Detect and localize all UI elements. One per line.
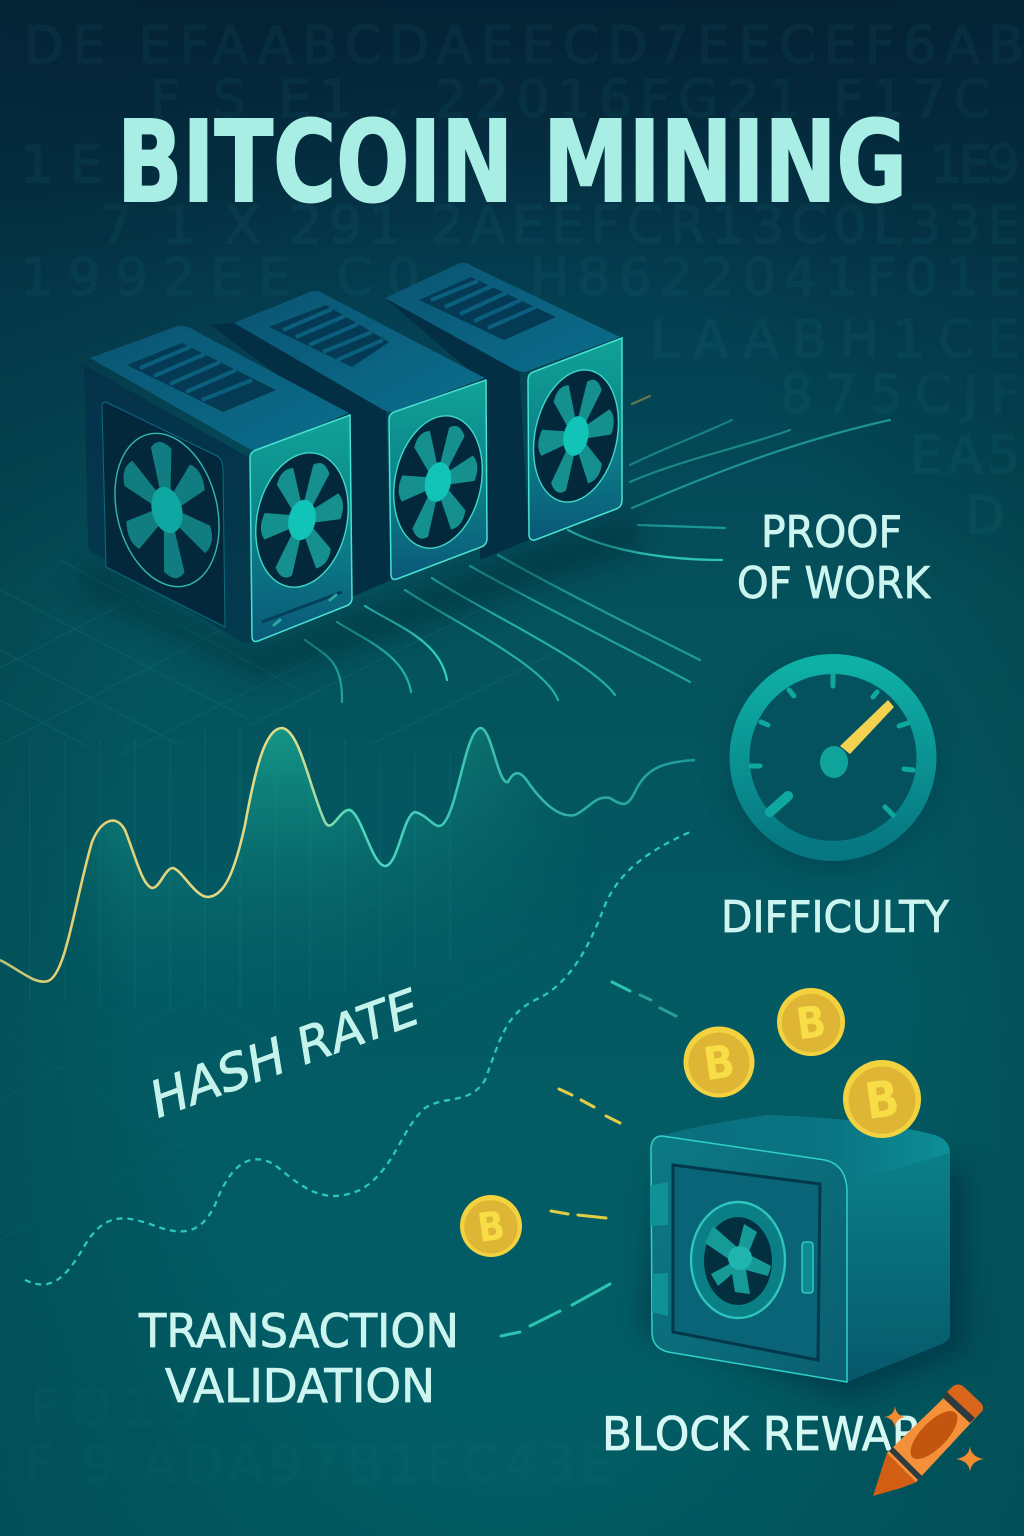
background hex text: F S E1 . 22016FG21 F17C	[150, 70, 990, 130]
background hex text: FO19	[30, 1378, 200, 1438]
miners	[80, 263, 640, 680]
coins above safe	[684, 988, 921, 1138]
label: transaction validation: TRANSACTION	[138, 1304, 459, 1358]
lower diagonal floor lines	[0, 880, 700, 1330]
miner 3	[385, 263, 630, 560]
background hex text: 1 E	[20, 135, 102, 195]
background hex text: D	[965, 486, 1005, 546]
dashed transaction path	[25, 832, 690, 1285]
safe	[640, 1115, 970, 1400]
label: transaction validation: VALIDATION	[165, 1359, 435, 1413]
safe handle	[802, 1242, 813, 1293]
background hex text: F 9 ADA97B1FC43E	[24, 1435, 614, 1495]
data lines from miners	[305, 396, 890, 702]
miner 2	[210, 291, 494, 600]
hash rate chart	[0, 728, 695, 1010]
label: transaction validation	[138, 1304, 459, 1413]
label: proof of work: PROOF	[761, 507, 902, 558]
background hex text: 1E9	[930, 135, 1020, 195]
miner shadow	[80, 510, 640, 680]
crayon icon	[873, 1384, 984, 1496]
background hex text: H8622041F01E	[530, 248, 1020, 308]
coin: small left	[460, 1195, 522, 1257]
label: proof of work	[737, 507, 931, 609]
background hex text: DE EFAABCDAEECD7EECEF6AB	[24, 16, 1024, 76]
label: block reward: BLOCK REWARD	[602, 1407, 956, 1461]
safe front	[651, 1136, 847, 1382]
label: proof of work: OF WORK	[737, 558, 931, 609]
safe dial	[691, 1202, 785, 1318]
background hex text: 7 1 X 291 2AEEFCR13C0L33E	[100, 196, 1020, 256]
safe top	[652, 1115, 950, 1184]
gauge icon	[729, 661, 937, 869]
miner 1	[84, 326, 360, 643]
safe side	[847, 1153, 950, 1382]
background hex text: 1992EE C0	[20, 248, 420, 308]
background hex text: LAABH1CE	[650, 310, 1020, 370]
floor grid	[0, 560, 560, 1010]
dashes towards safe	[501, 982, 676, 1336]
background hex text: 875CJF	[780, 365, 1020, 425]
label: difficulty: DIFFICULTY	[721, 892, 949, 943]
label: hash rate: HASH RATE	[142, 978, 427, 1129]
safe door	[673, 1165, 820, 1360]
background hex text: EA5	[910, 426, 1020, 486]
safe hinges	[650, 1182, 668, 1316]
